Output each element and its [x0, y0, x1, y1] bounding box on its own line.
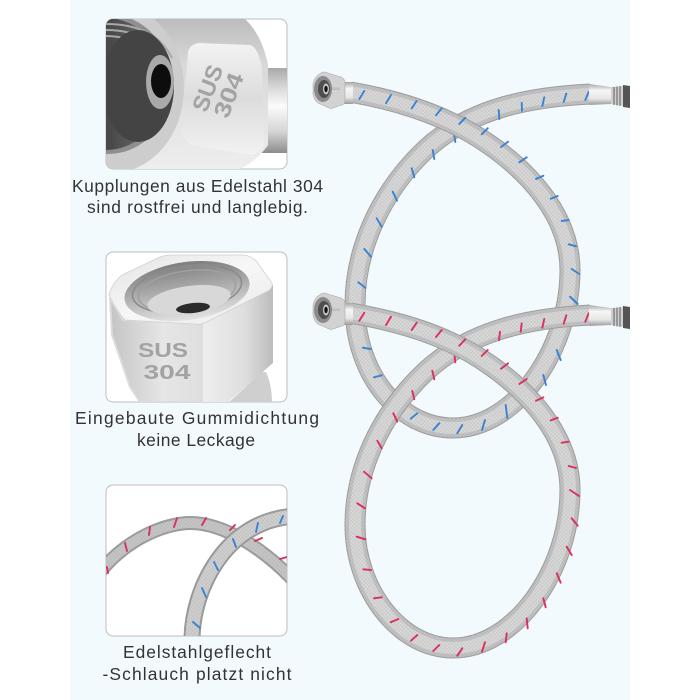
caption: coupling — [72, 176, 323, 217]
lower left hose nut — [313, 293, 353, 329]
caption: rubber seal: Eingebaute Gummidichtung — [75, 408, 319, 428]
caption: braided hose — [102, 642, 292, 684]
product illustration: two braided hoses — [313, 72, 630, 656]
engraved label SUS 304: SUS — [187, 61, 228, 115]
panel: stainless steel coupling side view — [73, 18, 323, 216]
engraved nut label: SUS — [332, 307, 340, 312]
caption: rubber seal: keine Leckage — [137, 430, 255, 450]
caption: braided hose: -Schlauch platzt nicht — [102, 664, 292, 684]
engraved label SUS 304: SUS — [138, 340, 188, 362]
caption: coupling: sind rostfrei und langlebig. — [87, 197, 308, 217]
red-striped hot water hose — [350, 313, 590, 656]
card frame with fitting illustration — [106, 18, 288, 170]
engraved label SUS 304 — [138, 343, 190, 379]
caption: braided hose: Edelstahlgeflecht — [123, 642, 271, 662]
caption: rubber seal — [75, 408, 319, 450]
engraved label SUS 304 — [193, 65, 244, 118]
caption: coupling: Kupplungen aus Edelstahl 304 — [72, 176, 323, 196]
engraved nut label: SUS — [332, 86, 340, 91]
card frame with nut illustration — [106, 252, 287, 403]
engraved label SUS 304: 304 — [208, 69, 249, 121]
lower right threaded end — [589, 305, 630, 329]
background panel — [70, 0, 630, 700]
blue-striped cold water hose — [350, 91, 590, 433]
panel: coupling with built-in rubber seal — [75, 252, 319, 450]
engraved label SUS 304: 304 — [144, 362, 192, 384]
upper right threaded end — [589, 84, 630, 108]
panel: braided stainless hose detail — [100, 485, 295, 684]
upper left hose nut — [313, 72, 353, 108]
card frame with hose close-up — [100, 485, 295, 640]
